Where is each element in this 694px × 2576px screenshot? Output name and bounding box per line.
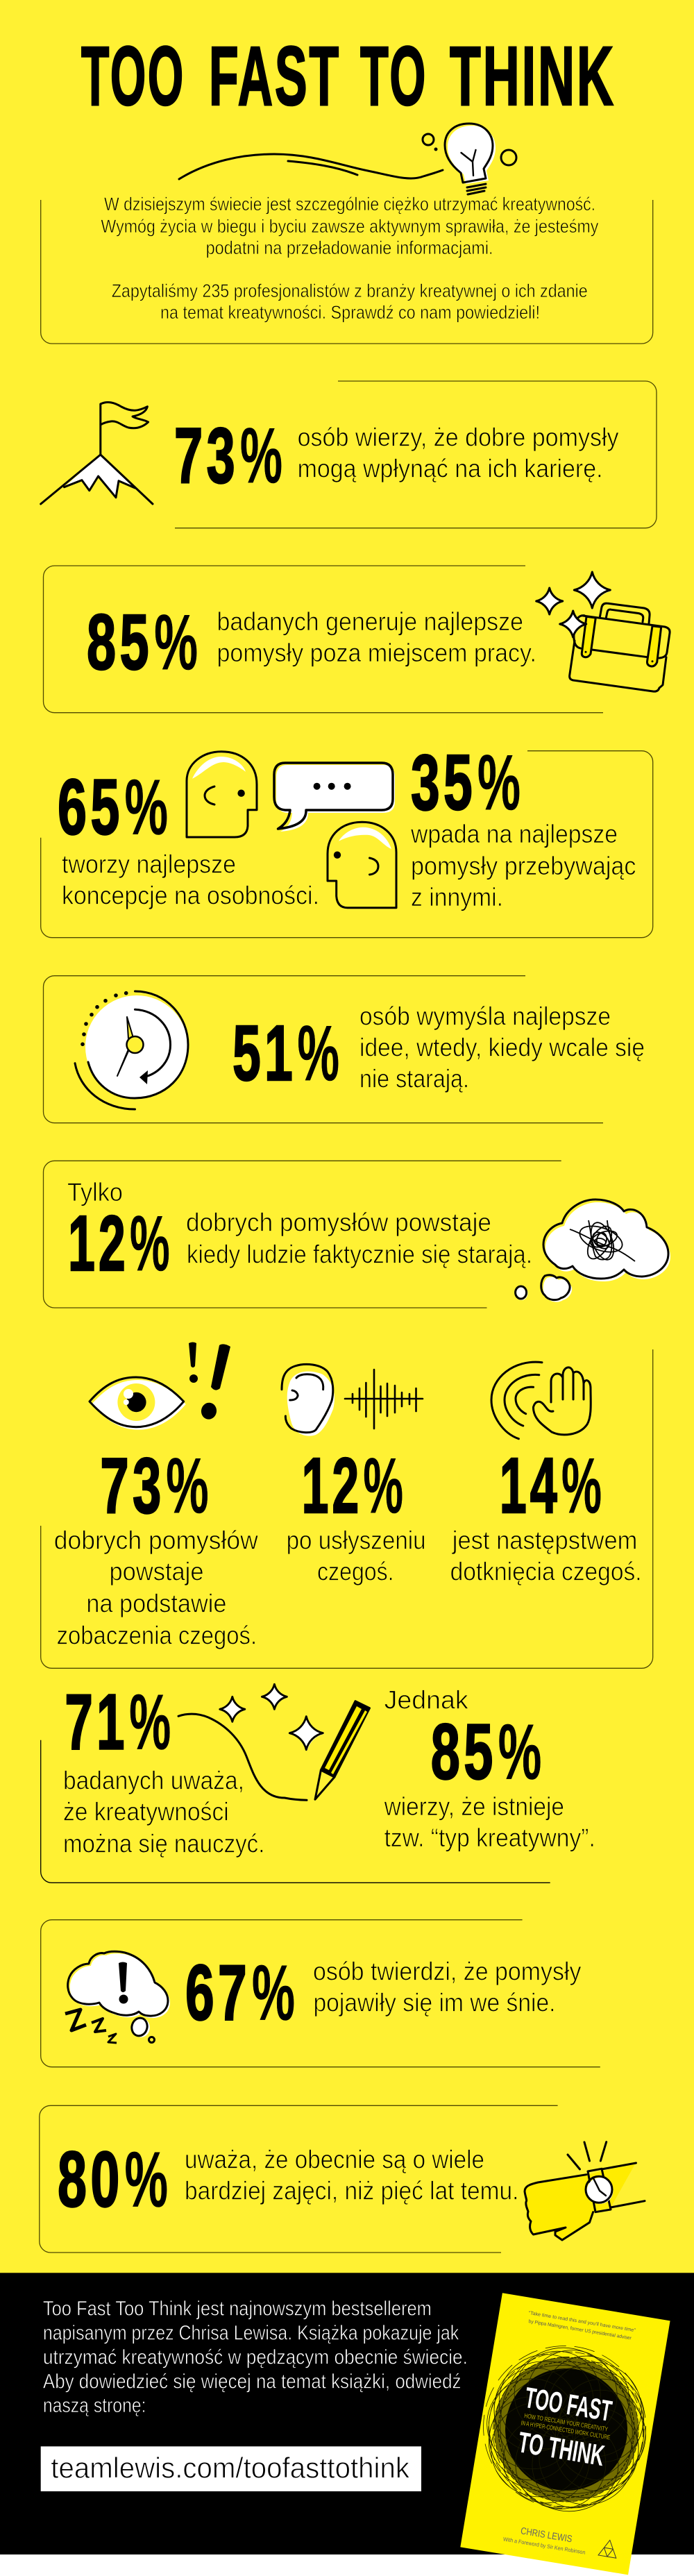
description — [313, 1957, 582, 2017]
book author: CHRIS LEWIS — [520, 2525, 573, 2544]
description: nie starają. — [359, 1065, 469, 1093]
footer text: Too Fast Too Think jest najnowszym bestsellerem — [43, 2298, 432, 2321]
panel frame — [41, 1740, 550, 1883]
panel frame — [43, 566, 603, 713]
book cover — [447, 2291, 684, 2576]
panel frame — [175, 381, 657, 528]
description: idee, wtedy, kiedy wcale się — [359, 1034, 645, 1062]
panel: 51% not trying — [43, 976, 645, 1123]
panel: 80% busier — [40, 2105, 645, 2253]
panel frame — [41, 1349, 653, 1668]
footer text — [43, 2298, 468, 2417]
description: 85%: wierzy, że istnieje — [384, 1792, 564, 1821]
stat: 80%: 80 — [58, 2135, 124, 2223]
panel: 85% outside work — [43, 566, 670, 713]
icon: head facing right — [187, 752, 257, 837]
icon: clock — [75, 991, 188, 1109]
description: hearing — [287, 1526, 426, 1586]
stat: 35%: 35 — [411, 739, 476, 826]
description: touching: dotknięcia czegoś. — [450, 1558, 642, 1586]
description: seeing: na podstawie — [86, 1590, 226, 1618]
icon: waving hand — [491, 1362, 591, 1439]
intro text: Wymóg życia w biegu i byciu zawsze aktywnym sprawiła, że jesteśmy — [101, 216, 599, 237]
panel frame — [43, 1161, 561, 1308]
description: seeing: powstaje — [110, 1558, 204, 1586]
description: with others: z innymi. — [411, 883, 503, 911]
book quote: “Take time to read this and you’ll have more time” — [528, 2311, 636, 2333]
panel: senses — [41, 1342, 653, 1668]
description: badanych generuje najlepsze — [217, 607, 523, 636]
book subtitle: IN A HYPER-CONNECTED WORK CULTURE — [520, 2419, 611, 2441]
icon: eye with exclamation marks — [90, 1342, 230, 1430]
description: pojawiły się im we śnie. — [314, 1988, 555, 2017]
description: osób wierzy, że dobre pomysły — [298, 423, 619, 452]
description: uważa, że obecnie są o wiele — [185, 2145, 484, 2173]
description: seeing: zobaczenia czegoś. — [57, 1621, 257, 1649]
description: touching: jest następstwem — [452, 1526, 637, 1555]
stat: 73%: % — [240, 412, 282, 499]
description — [186, 1208, 532, 1268]
description: osób wymyśla najlepsze — [359, 1002, 611, 1031]
footer text: naszą stronę: — [43, 2394, 146, 2417]
description — [217, 607, 536, 667]
description: 85% — [384, 1792, 595, 1852]
stat: 71%: % — [129, 1678, 171, 1765]
book author: With a Foreword by Sir Ken Robinson — [502, 2536, 586, 2556]
stat: 85%: 85 — [87, 598, 153, 686]
book title: TOO FAST — [523, 2381, 614, 2427]
stat: 73% seeing: % — [166, 1442, 209, 1529]
stat: 12% hearing: % — [363, 1442, 403, 1529]
intro text: podatni na przeładowanie informacjami. — [206, 237, 493, 258]
description: pomysły poza miejscem pracy. — [217, 639, 536, 667]
panel frame — [41, 1920, 600, 2067]
book scribble — [453, 2318, 679, 2541]
icon: head facing left — [328, 822, 396, 908]
stat: 14% touching: % — [561, 1442, 602, 1529]
stat: 71%: 71 — [65, 1678, 128, 1765]
stat: 80%: % — [125, 2135, 168, 2223]
description: 71% — [63, 1766, 264, 1858]
panel: 67% dreaming — [41, 1920, 600, 2067]
description: with others: wpada na najlepsze — [410, 820, 618, 848]
icon: speech bubble — [274, 763, 395, 832]
stat: 12% hearing: 12 — [302, 1442, 362, 1529]
panel frame — [43, 976, 603, 1123]
stat: 73%: 73 — [174, 412, 239, 499]
publisher logo — [598, 2539, 619, 2558]
book title — [515, 2381, 614, 2472]
icon: briefcase with sparkles — [536, 572, 670, 691]
stat: 67%: 67 — [185, 1948, 251, 2036]
footer text: Aby dowiedzieć się więcej na temat książki, odwiedź — [43, 2371, 461, 2393]
stat: 35%: % — [477, 739, 520, 826]
description: bardziej zajęci, niż pięć lat temu. — [185, 2176, 518, 2205]
stat: 51%: % — [297, 1009, 339, 1097]
description: 71%: badanych uważa, — [63, 1766, 244, 1794]
description: 71%: można się nauczyć. — [63, 1829, 264, 1858]
book title: TO THINK — [516, 2425, 607, 2472]
description — [185, 2145, 518, 2205]
description: dobrych pomysłów powstaje — [186, 1208, 491, 1236]
title: TOO — [81, 28, 185, 123]
stat: 65%: 65 — [58, 764, 124, 851]
description: touching — [450, 1526, 642, 1586]
icon: ear with sound wave — [282, 1364, 423, 1436]
intro text — [101, 194, 599, 323]
panel frame — [41, 751, 653, 938]
description: alone — [62, 850, 319, 909]
icon: pencil with curve and sparkles — [178, 1684, 369, 1800]
website link box: teamlewis.com/toofasttothink — [51, 2451, 410, 2484]
footer band — [0, 2273, 694, 2554]
title: FAST — [209, 28, 341, 123]
description: alone: tworzy najlepsze — [62, 850, 236, 878]
stat: 51%: 51 — [232, 1009, 296, 1097]
stat: 85%: 85 — [431, 1708, 497, 1796]
stat: 67%: % — [252, 1948, 295, 2036]
description: with others — [410, 820, 636, 911]
stat: 12%: 12 — [68, 1199, 129, 1287]
description: seeing: dobrych pomysłów — [54, 1526, 258, 1555]
panel: 71% / 85% learnable creativity — [41, 1678, 595, 1883]
title: TO — [360, 28, 428, 123]
footer text: napisanym przez Chrisa Lewisa. Książka pokazuje jak — [43, 2322, 459, 2345]
description: hearing: po usłyszeniu — [287, 1526, 426, 1555]
label: Jednak: Jednak — [384, 1686, 468, 1715]
description: alone: koncepcje na osobności. — [62, 881, 319, 909]
description: mogą wpłynąć na ich karierę. — [298, 455, 603, 483]
panel frame — [40, 2105, 558, 2253]
description: hearing: czegoś. — [317, 1558, 394, 1586]
icon: thought cloud with scribble — [515, 1199, 670, 1302]
book subtitle: HOW TO RECLAIM YOUR CREATIVITY — [524, 2412, 609, 2433]
icon: dream cloud with Z letters — [65, 1951, 170, 2043]
description: 71%: że kreatywności — [63, 1798, 229, 1826]
intro text: na temat kreatywności. Sprawdź co nam powiedzieli! — [160, 302, 540, 323]
stat: 12%: % — [130, 1199, 170, 1287]
icon: wristwatch — [525, 2142, 645, 2240]
label: Tylko: Tylko — [67, 1178, 123, 1206]
description: with others: pomysły przebywając — [411, 852, 636, 880]
book subtitle — [520, 2411, 612, 2441]
panel: intro — [41, 124, 653, 344]
description: kiedy ludzie faktycznie się starają. — [187, 1240, 532, 1268]
book author — [502, 2523, 588, 2556]
icon: mountain with flag — [41, 402, 153, 504]
description — [359, 1002, 645, 1093]
panel: 65% / 35% alone vs with others — [41, 739, 653, 938]
description: 85%: tzw. “typ kreatywny”. — [384, 1824, 595, 1852]
icon: light bulb with swoosh — [179, 124, 516, 194]
panel frame — [41, 200, 653, 344]
panel: 12% when trying — [43, 1161, 670, 1308]
stat: 65%: % — [125, 764, 168, 851]
description: seeing — [54, 1526, 258, 1649]
stat: 85%: % — [154, 598, 198, 686]
intro text: Zapytaliśmy 235 profesjonalistów z branży kreatywnej o ich zdanie — [112, 280, 588, 301]
title — [81, 28, 616, 123]
stat: 85%: % — [498, 1708, 541, 1796]
description — [298, 423, 619, 483]
footer text: utrzymać kreatywność w pędzącym obecnie świecie. — [43, 2346, 468, 2369]
book quote: by Pippa Malmgren, former US presidential adviser — [528, 2319, 632, 2341]
intro text: W dzisiejszym świecie jest szczególnie ciężko utrzymać kreatywność. — [104, 194, 595, 214]
description: osób twierdzi, że pomysły — [313, 1957, 582, 1985]
stat: 14% touching: 14 — [500, 1442, 561, 1529]
panel: 73% career — [41, 381, 657, 528]
stat: 73% seeing: 73 — [100, 1442, 165, 1529]
